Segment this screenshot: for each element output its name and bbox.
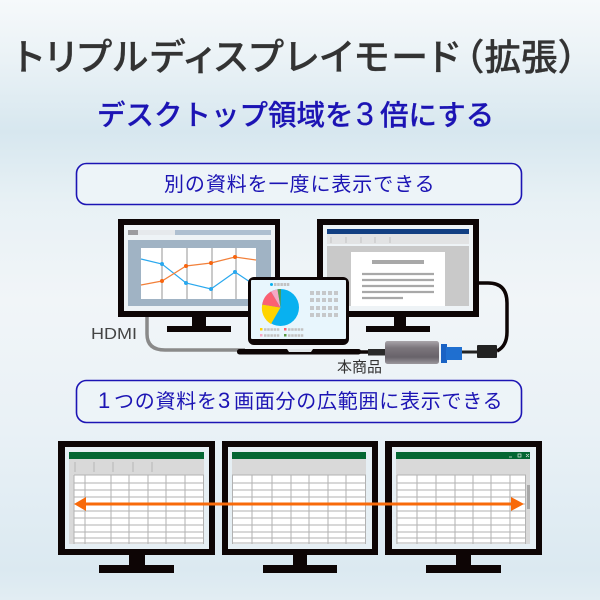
monitor: bottom center spreadsheet (222, 441, 378, 573)
callout: separate documents: 別の資料を一度に表示できる (164, 173, 436, 196)
title: （拡張） (448, 37, 594, 78)
monitor: right with document (317, 219, 479, 332)
line chart: orange series (141, 257, 256, 285)
pie chart (262, 289, 299, 326)
cable: VGA black (479, 283, 507, 351)
callout: one document across three screens: 3 (218, 388, 231, 413)
callout: one document across three screens: 1 (98, 388, 111, 413)
cable: HDMI gray (147, 317, 245, 350)
adapter: product with cables (360, 341, 497, 364)
line chart: blue series (141, 259, 256, 289)
laptop (237, 277, 361, 354)
pie legend (260, 328, 304, 336)
callout: one document across three screens: 画面分の広範囲に表示できる (234, 390, 503, 413)
monitor stand (167, 316, 231, 332)
arrow: spans three screens (74, 497, 524, 511)
subtitle: デスクトップ領域を (97, 100, 354, 132)
icon grid (310, 293, 338, 315)
monitor: bottom left spreadsheet (58, 441, 215, 573)
document page (351, 252, 445, 306)
chart panel (141, 248, 256, 299)
title: トリプルディスプレイモード (15, 37, 459, 78)
callout: one document across three screens (76, 380, 522, 422)
label: HDMI: HDMI (91, 326, 137, 343)
subtitle: 3 (356, 96, 374, 132)
monitor stand (366, 316, 430, 332)
monitor: bottom right spreadsheet (385, 441, 542, 573)
subtitle: 倍にする (380, 100, 494, 132)
label: this product: 本商品 (337, 359, 382, 376)
monitor: left with chart (118, 219, 280, 332)
callout: separate documents (76, 164, 522, 204)
callout: one document across three screens: つの資料を (114, 390, 218, 413)
